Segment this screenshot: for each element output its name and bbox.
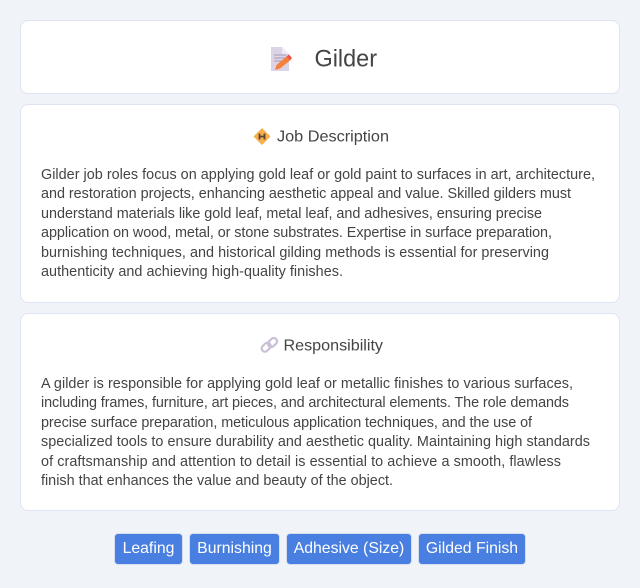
text block: responsibility: specialized tools to ensure durability and aesthetic quality. Maintaining high standards: [41, 434, 590, 450]
text block: job description: Gilder job roles focus on applying gold leaf or gold paint to surfaces in art, architecture,: [41, 167, 595, 183]
text block: job description: [41, 167, 595, 280]
text block: job description: authenticity and achieving high-quality finishes.: [41, 264, 343, 280]
icon: chain link: [260, 337, 278, 353]
icon: document with pencil: [271, 47, 292, 71]
tag: Burnishing: Burnishing: [197, 540, 272, 557]
text block: responsibility: finish that enhances the value and beauty of the object.: [41, 473, 393, 489]
text block: job description: burnishing techniques, and historical gilding methods is essential for preserving: [41, 245, 549, 261]
tag: Gilded Finish: [418, 533, 526, 565]
text block: job description: and restoration projects, enhancing aesthetic appeal and value. Skilled gilders must: [41, 186, 571, 202]
heading: responsibility: Responsibility: [284, 338, 383, 354]
text block: responsibility: [41, 376, 590, 489]
text block: responsibility: A gilder is responsible for applying gold leaf or metallic finishes to various surfaces,: [41, 376, 573, 392]
panel: responsibility: [20, 313, 620, 511]
tag: Adhesive (Size): Adhesive (Size): [294, 540, 404, 557]
tag: Adhesive (Size): [286, 533, 412, 565]
text block: responsibility: including frames, furniture, art pieces, and architectural elements. The role demands: [41, 395, 569, 411]
text block: responsibility: precise surface preparation, meticulous application techniques, and the use of: [41, 415, 533, 431]
tag: Gilded Finish: Gilded Finish: [426, 540, 518, 557]
tag: Burnishing: [189, 533, 280, 565]
text block: responsibility: of craftsmanship and attention to detail is essential to achieve a smooth, flawless: [41, 454, 561, 470]
text block: job description: application on wood, metal, or stone substrates. Expertise in surface preparation,: [41, 225, 552, 241]
tag: Leafing: [114, 533, 183, 565]
panel: job description: [20, 104, 620, 303]
tag: Leafing: Leafing: [123, 540, 174, 557]
heading: job description: Job Description: [277, 128, 389, 146]
panel: title card: [20, 20, 620, 94]
title group: [271, 46, 377, 72]
text block: job description: understand materials like gold leaf, metal leaf, and adhesives, ensuring precise: [41, 206, 542, 222]
title text: Gilder: [314, 46, 377, 72]
icon: orange diamond sign: [254, 129, 270, 144]
